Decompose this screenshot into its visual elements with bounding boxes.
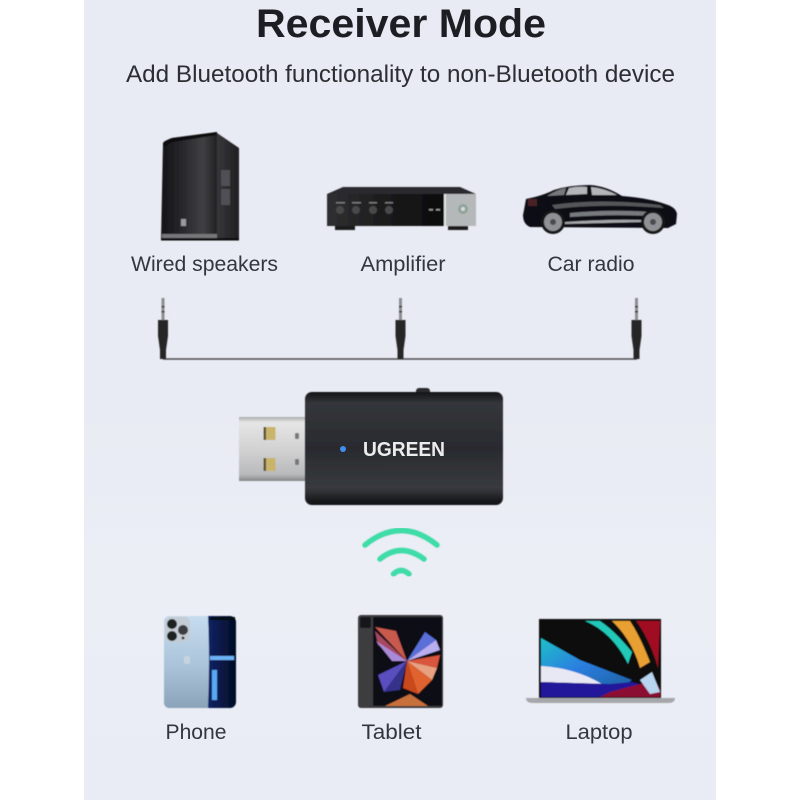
status LED	[340, 446, 346, 452]
label: laptop: Laptop	[566, 721, 632, 744]
label: car radio: Car radio	[548, 253, 634, 276]
icon: tablet	[358, 615, 443, 708]
label: amplifier: Amplifier	[360, 253, 446, 276]
usb plug	[239, 417, 307, 481]
jack 2	[396, 298, 406, 359]
icon: wireless signal	[365, 530, 437, 574]
dongle body	[305, 388, 503, 505]
icon: car	[523, 185, 677, 234]
icon: phone	[164, 616, 236, 708]
brand logo: UGREEN	[363, 439, 445, 461]
icon: laptop	[526, 619, 675, 703]
jack 3	[632, 298, 642, 359]
icon: wired speaker	[161, 132, 239, 240]
USB Bluetooth dongle	[239, 388, 503, 505]
subtitle: Add Bluetooth functionality to non-Bluetooth device	[126, 61, 675, 88]
cable: three audio jacks joined by a line	[158, 298, 642, 359]
label: phone: Phone	[166, 721, 226, 744]
label: tablet: Tablet	[362, 721, 422, 744]
icon: amplifier	[327, 187, 476, 230]
title: Receiver Mode	[256, 2, 546, 46]
label: wired speakers: Wired speakers	[131, 253, 278, 276]
panel: background	[84, 0, 716, 800]
jack 1	[158, 298, 168, 359]
